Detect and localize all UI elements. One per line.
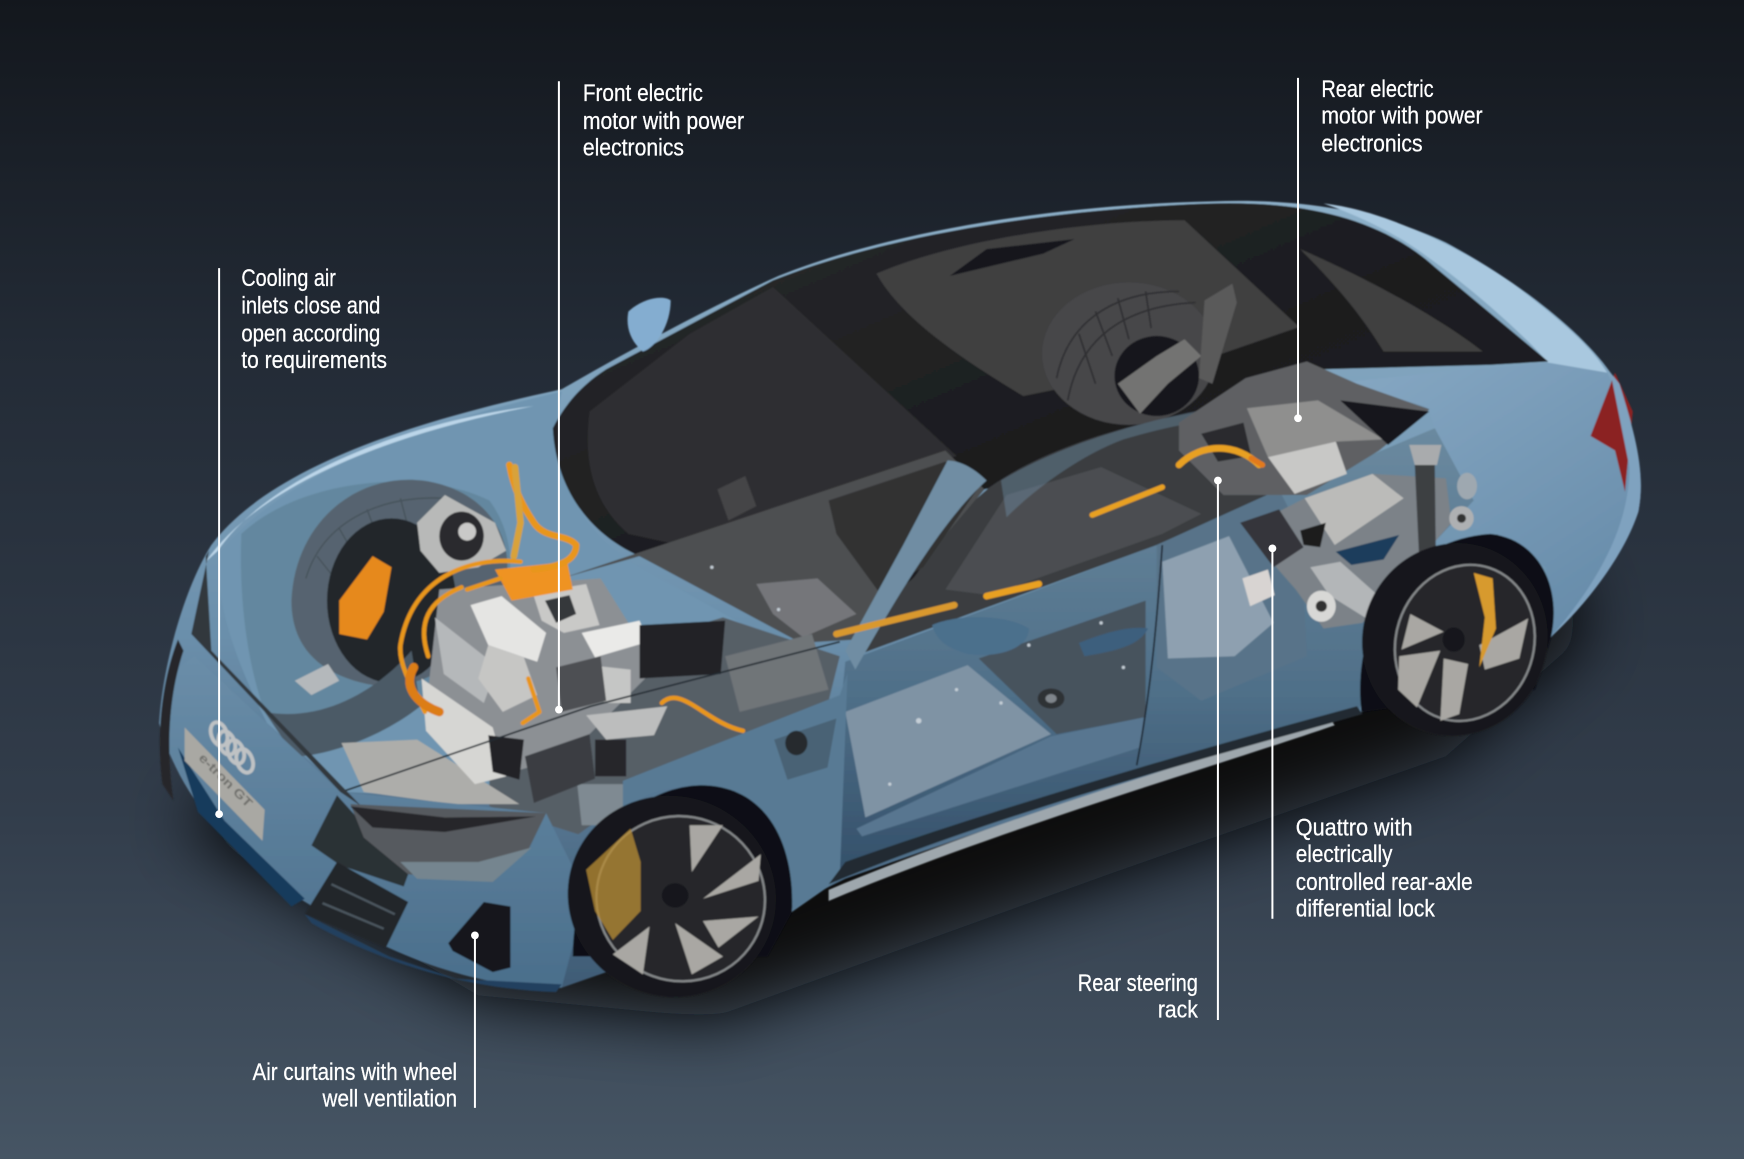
callout: cooling air inlets: Cooling air	[241, 265, 336, 292]
rivets	[710, 566, 1125, 786]
callout: rear steering rack	[1078, 477, 1222, 1024]
hood transparent panel	[218, 392, 801, 801]
callout: quattro differential: controlled rear-axle	[1296, 869, 1473, 896]
rear differential and suspension	[1240, 445, 1477, 628]
front wheel arch	[573, 785, 792, 957]
car illustration	[159, 201, 1641, 1026]
rear orange cables	[836, 448, 1262, 634]
roof highlight	[1324, 204, 1607, 373]
callout: cooling air inlets	[215, 265, 387, 818]
rear seats through glass	[876, 220, 1299, 396]
lower dark intake	[305, 862, 408, 948]
front orange cables	[400, 465, 743, 731]
rear wheel arch	[1360, 534, 1554, 712]
front strut top mount	[417, 495, 506, 573]
a pillar	[845, 460, 987, 670]
interior seat dashboard	[588, 287, 957, 547]
door window rail	[1001, 395, 1430, 517]
rear quarter panel	[1223, 363, 1641, 640]
headlight and dark corner	[311, 795, 546, 886]
callout: rear electric motor	[1294, 76, 1483, 422]
bumper base	[159, 656, 586, 988]
callout: cooling air inlets: inlets close and	[241, 293, 380, 320]
roof vent slit	[950, 239, 1074, 276]
air curtain duct	[448, 902, 511, 972]
steering column	[756, 578, 856, 637]
Audi rings	[208, 720, 256, 775]
battery floor through window	[945, 467, 1201, 595]
callout: rear steering rack: rack	[1158, 997, 1199, 1024]
hood shut line	[341, 642, 840, 792]
callout: front electric motor: motor with power	[583, 108, 744, 135]
rear motor assembly	[1179, 362, 1429, 495]
rear bumper highlight	[1552, 373, 1641, 636]
battery module	[1162, 536, 1274, 658]
battery warning label	[1242, 569, 1275, 606]
tail light	[1591, 373, 1633, 492]
side sill	[829, 717, 1335, 901]
ground shadow	[184, 556, 1585, 1018]
door shut line	[1137, 545, 1162, 765]
roof and windshield glass	[553, 203, 1548, 640]
callout: cooling air inlets: to requirements	[241, 347, 387, 374]
door mirror shape through glass	[932, 617, 1029, 655]
callout: cooling air inlets: open according	[241, 320, 380, 347]
intake slats	[323, 884, 395, 929]
front wheel	[539, 767, 804, 1026]
callout: quattro differential: electrically	[1296, 841, 1393, 868]
callout: rear steering rack: Rear steering	[1078, 970, 1198, 997]
centre console vent	[717, 476, 756, 521]
callout: quattro differential: differential lock	[1296, 896, 1435, 923]
steering wheel	[869, 507, 922, 583]
front fender	[623, 673, 848, 912]
callout: front electric motor: electronics	[583, 135, 684, 162]
side window cutaway	[854, 397, 1429, 656]
callout: front electric motor	[555, 80, 744, 714]
battery plug	[1038, 688, 1064, 709]
front fender bracket	[295, 664, 339, 695]
rear wheel	[1337, 519, 1573, 760]
callout: quattro differential: Quattro with	[1296, 814, 1413, 841]
left grille dark	[160, 640, 184, 801]
hood lower lip	[265, 651, 420, 756]
hood leading edge dark band	[191, 551, 361, 806]
licence plate: e-tron GT	[196, 750, 256, 810]
bumper underside	[305, 914, 562, 992]
callout: rear electric motor: electronics	[1321, 130, 1423, 157]
callout: air curtains	[252, 932, 479, 1113]
dark battery panel	[979, 601, 1146, 734]
hood highlight	[206, 406, 534, 562]
callout: front electric motor: Front electric	[583, 80, 703, 107]
front centre grille blue	[178, 747, 305, 906]
fuel door	[774, 719, 836, 780]
rear tyre through glass	[1042, 283, 1237, 425]
rear side battery	[1157, 489, 1307, 701]
door handle	[1079, 628, 1148, 656]
callout: air curtains: Air curtains with wheel	[252, 1059, 457, 1086]
front battery lower panel	[845, 665, 1051, 818]
lower door panels	[835, 428, 1474, 870]
callout: rear electric motor: Rear electric	[1321, 76, 1434, 103]
wheel arch well under hood	[241, 482, 510, 756]
callout: rear electric motor: motor with power	[1321, 102, 1483, 129]
callout: quattro differential	[1269, 544, 1473, 923]
chassis floor grey	[562, 450, 984, 643]
trim through rear side glass	[1300, 249, 1483, 351]
exterior mirror	[628, 298, 671, 351]
dark tunnel	[829, 462, 979, 592]
front hood tyre	[291, 480, 507, 686]
lower sill dark	[829, 706, 1362, 884]
callout: air curtains: well ventilation	[322, 1086, 457, 1113]
car body shell	[159, 201, 1641, 988]
door panel lower band	[856, 717, 1143, 836]
licence plate	[185, 727, 265, 841]
front engine bay	[341, 562, 840, 834]
